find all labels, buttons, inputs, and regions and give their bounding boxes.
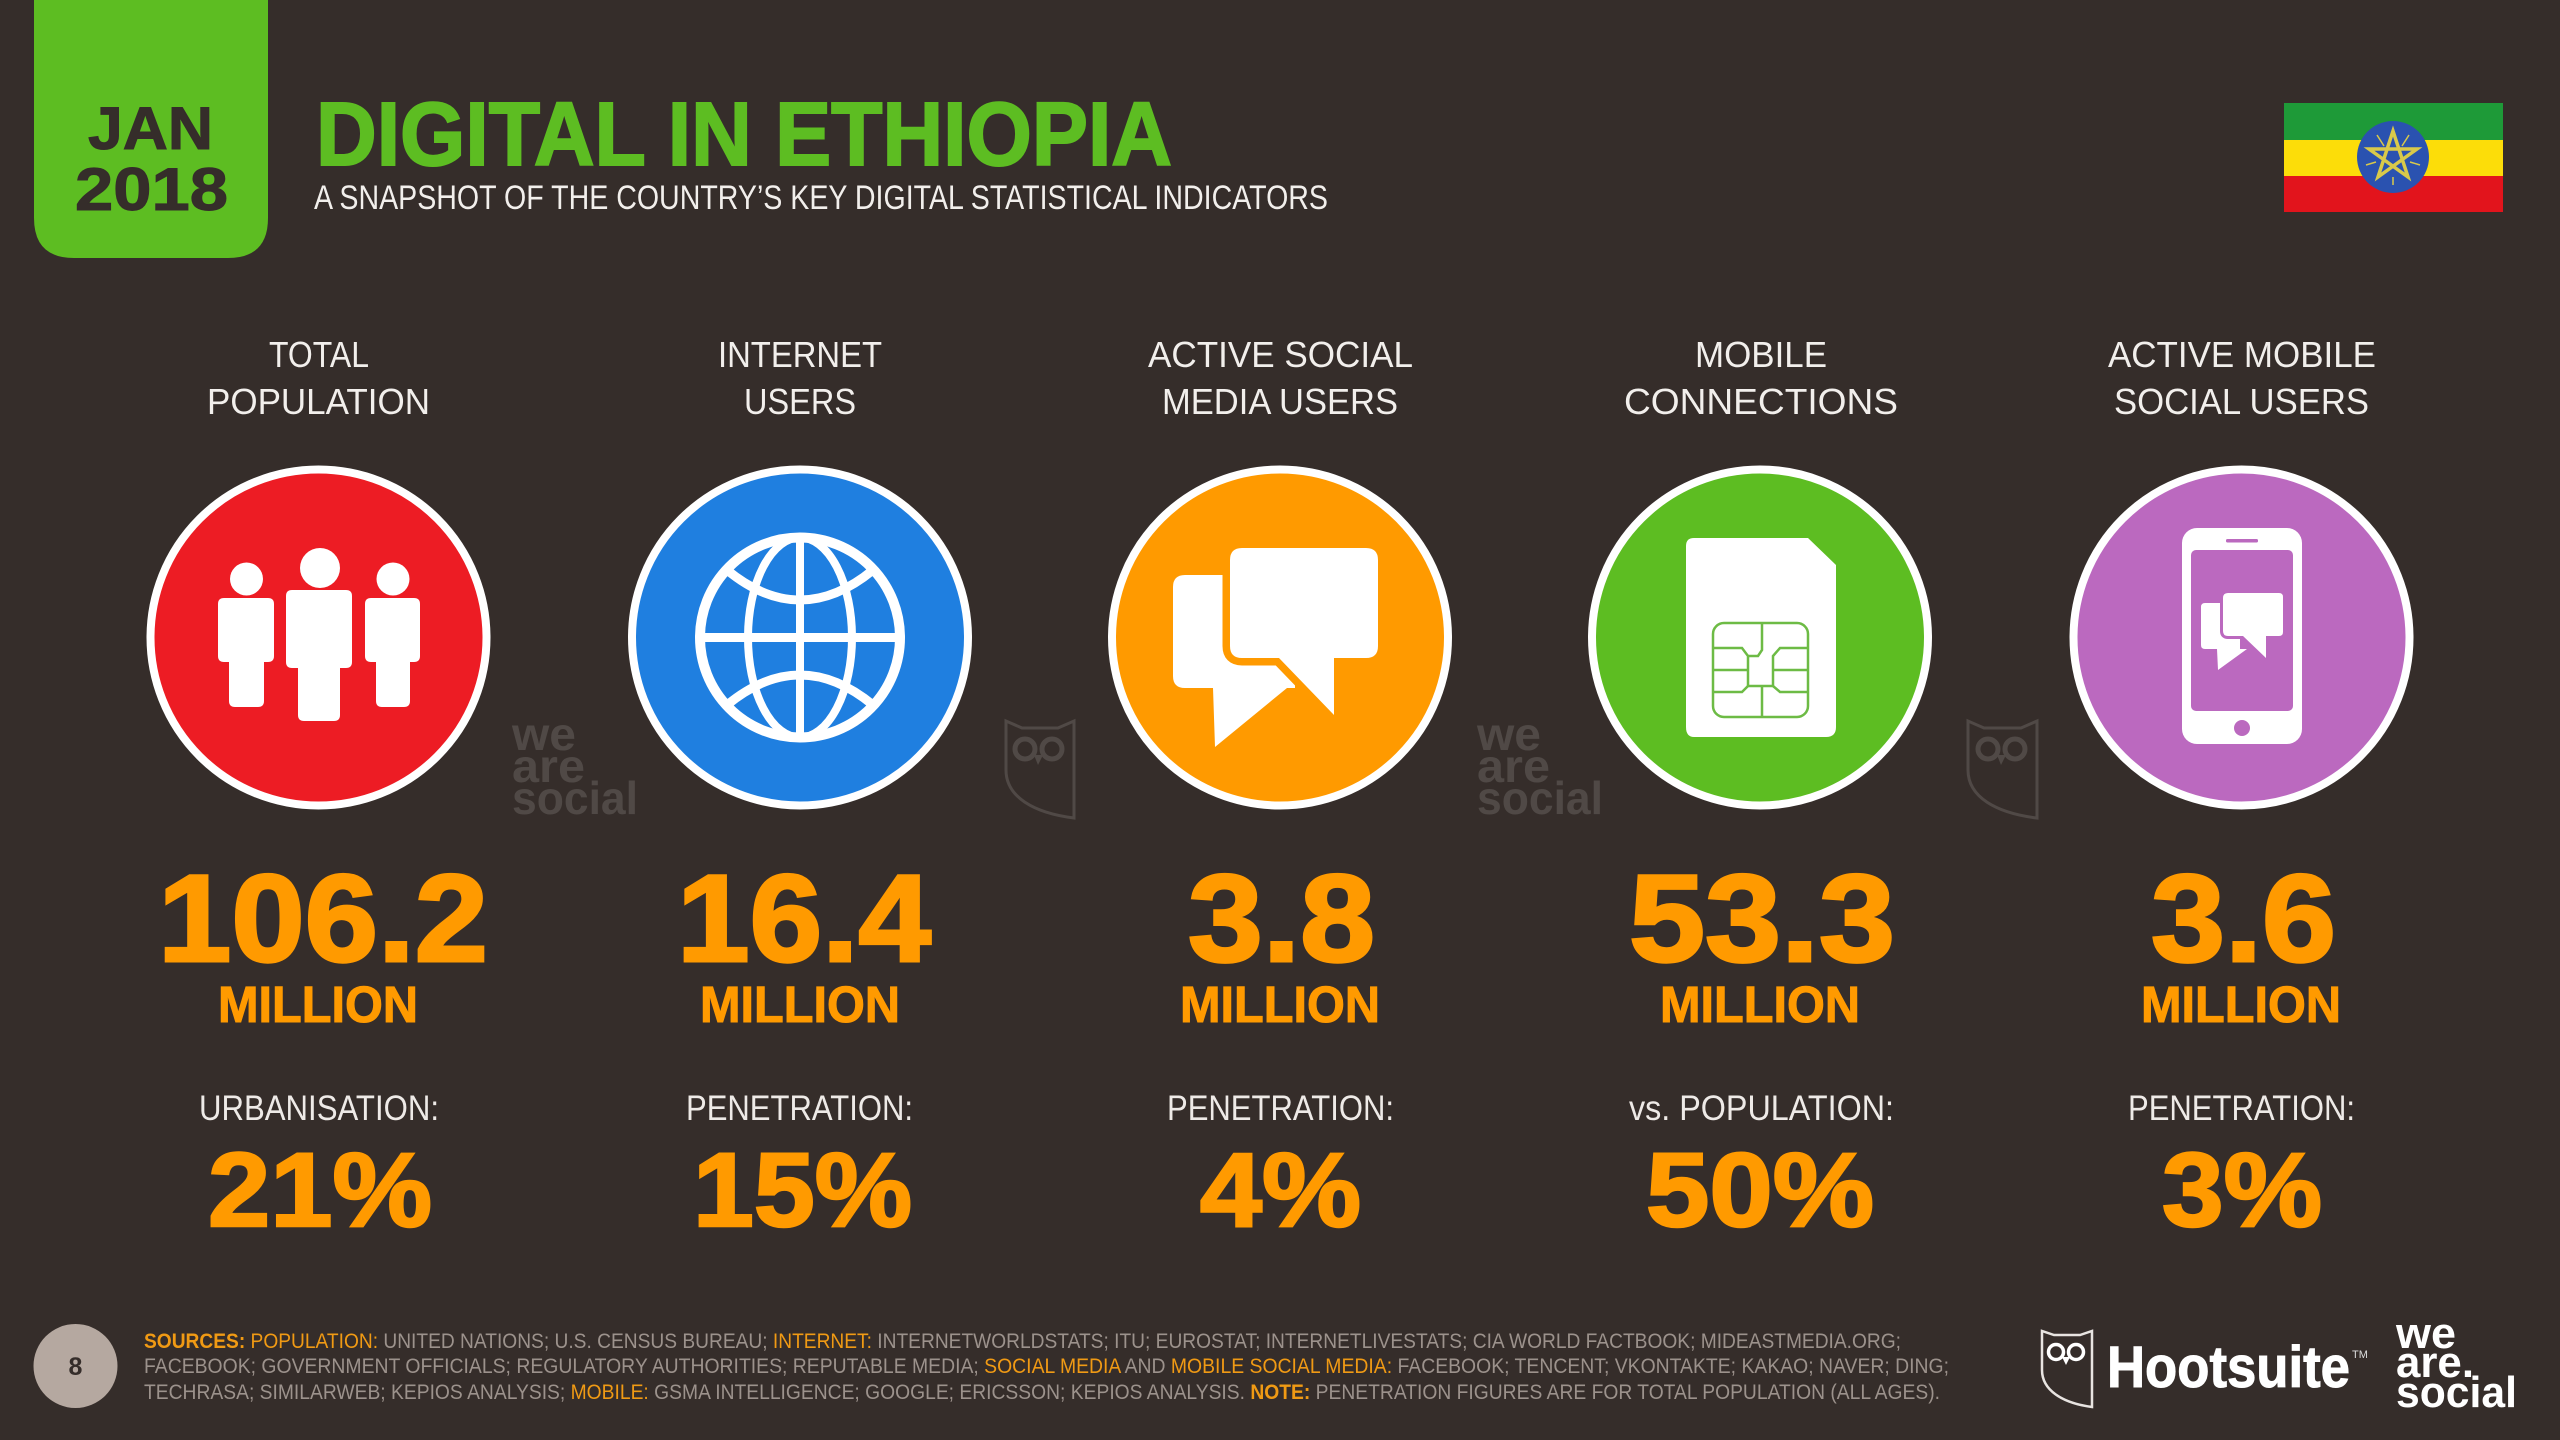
stat: mobile social penetration: 3% — [2162, 1132, 2322, 1249]
logo: Hootsuite — [2042, 1331, 2368, 1407]
heading: internet users: INTERNET — [718, 334, 882, 375]
logo: we are social — [2395, 1309, 2517, 1417]
unit: million: MILLION — [700, 976, 900, 1033]
title: DIGITAL IN ETHIOPIA — [316, 85, 1172, 185]
icon: phone with chat bubbles — [2074, 470, 2410, 806]
date tab: JAN — [88, 95, 213, 162]
watermark: we are social right: are — [1477, 740, 1550, 792]
watermark: we are social left: are — [512, 740, 585, 792]
unit: million: MILLION — [218, 976, 418, 1033]
stat: active social users: 3.8 — [1188, 850, 1375, 988]
watermark: we are social left: we — [511, 708, 576, 760]
stat: internet penetration: 15% — [693, 1132, 912, 1249]
panel: total population — [150, 334, 488, 1249]
heading: active social media users: MEDIA USERS — [1162, 381, 1398, 422]
stat: mobile connections: 53.3 — [1629, 850, 1895, 988]
watermark: owl right — [1968, 721, 2037, 818]
heading: active social media users — [1148, 334, 1413, 422]
icon: people — [150, 470, 486, 806]
panel: internet users — [632, 334, 968, 1249]
icon: Ethiopian flag — [2284, 103, 2503, 212]
stat: total population: 106.2 — [158, 850, 488, 988]
subtitle: A SNAPSHOT OF THE COUNTRY’S KEY DIGITAL STATISTICAL INDICATORS — [314, 179, 1328, 217]
heading: total population: TOTAL — [269, 334, 369, 375]
sources text — [144, 1330, 1949, 1404]
panel: active social media users — [1112, 334, 1448, 1249]
logo: we are social: are. — [2396, 1338, 2474, 1387]
sub-label: penetration: PENETRATION: — [686, 1089, 913, 1128]
date tab — [34, 0, 268, 258]
heading: internet users: USERS — [744, 381, 856, 422]
unit: million: MILLION — [1660, 976, 1860, 1033]
icon: SIM card — [1592, 470, 1928, 806]
sub-label: penetration: PENETRATION: — [2128, 1089, 2355, 1128]
icon: globe — [632, 470, 968, 806]
logo: Hootsuite: Hootsuite — [2107, 1335, 2350, 1400]
sub-label: vs. population: vs. POPULATION: — [1629, 1089, 1894, 1128]
panel: mobile connections — [1592, 334, 1928, 1249]
logo: we are social: we — [2395, 1309, 2456, 1358]
stat: mobile vs population: 50% — [1646, 1132, 1874, 1249]
heading: active mobile social users — [2108, 334, 2376, 422]
heading: mobile connections — [1624, 334, 1898, 422]
logo: we are social: social — [2396, 1368, 2517, 1417]
heading: active mobile social users: ACTIVE MOBILE — [2108, 334, 2376, 375]
stat: social penetration: 4% — [1200, 1132, 1361, 1249]
watermark: we are social right — [1476, 708, 1603, 824]
heading: total population — [207, 334, 430, 422]
unit: million: MILLION — [1180, 976, 1380, 1033]
sources text: SOURCES: POPULATION: UNITED NATIONS; U.S. CENSUS BUREAU; INTERNET: INTERNETWORLDSTATS; ITU; EUROSTAT; INTERNETLIVESTATS; CIA WORLD FACTBOOK; MIDEASTMEDIA.ORG; — [144, 1330, 1901, 1353]
watermark: owl left — [1006, 721, 1074, 818]
sources text: TECHRASA; SIMILARWEB; KEPIOS ANALYSIS; MOBILE: GSMA INTELLIGENCE; GOOGLE; ERICSSON; KEPIOS ANALYSIS. NOTE: PENETRATION FIGURES ARE FOR TOTAL POPULATION (ALL AGES). — [144, 1381, 1940, 1404]
panel: active mobile social users — [2074, 334, 2410, 1249]
heading: internet users — [718, 334, 882, 422]
page number badge: 8 — [69, 1353, 83, 1381]
icon: chat bubbles — [1112, 470, 1448, 806]
date tab: 2018 — [75, 156, 228, 223]
stat: urbanisation: 21% — [208, 1132, 432, 1249]
stat: internet users: 16.4 — [677, 850, 931, 988]
watermark: we are social left: social — [512, 772, 638, 824]
sub-label: penetration: PENETRATION: — [1167, 1089, 1394, 1128]
stat: active mobile social users: 3.6 — [2151, 850, 2336, 988]
watermark: we are social right: social — [1477, 772, 1603, 824]
page number badge — [34, 1324, 118, 1408]
sources text: FACEBOOK; GOVERNMENT OFFICIALS; REGULATORY AUTHORITIES; REPUTABLE MEDIA; SOCIAL MEDIA AND MOBILE SOCIAL MEDIA: FACEBOOK; TENCENT; VKONTAKTE; KAKAO; NAVER; DING; — [144, 1355, 1949, 1378]
heading: mobile connections: MOBILE — [1695, 334, 1827, 375]
sub-label: urbanisation: URBANISATION: — [199, 1089, 439, 1128]
watermark: we are social left — [511, 708, 638, 824]
heading: active social media users: ACTIVE SOCIAL — [1148, 334, 1413, 375]
logo: Hootsuite: TM — [2352, 1349, 2368, 1361]
watermark: we are social right: we — [1476, 708, 1541, 760]
unit: million: MILLION — [2141, 976, 2341, 1033]
heading: active mobile social users: SOCIAL USERS — [2114, 381, 2369, 422]
heading: total population: POPULATION — [207, 381, 430, 422]
heading: mobile connections: CONNECTIONS — [1624, 381, 1898, 422]
